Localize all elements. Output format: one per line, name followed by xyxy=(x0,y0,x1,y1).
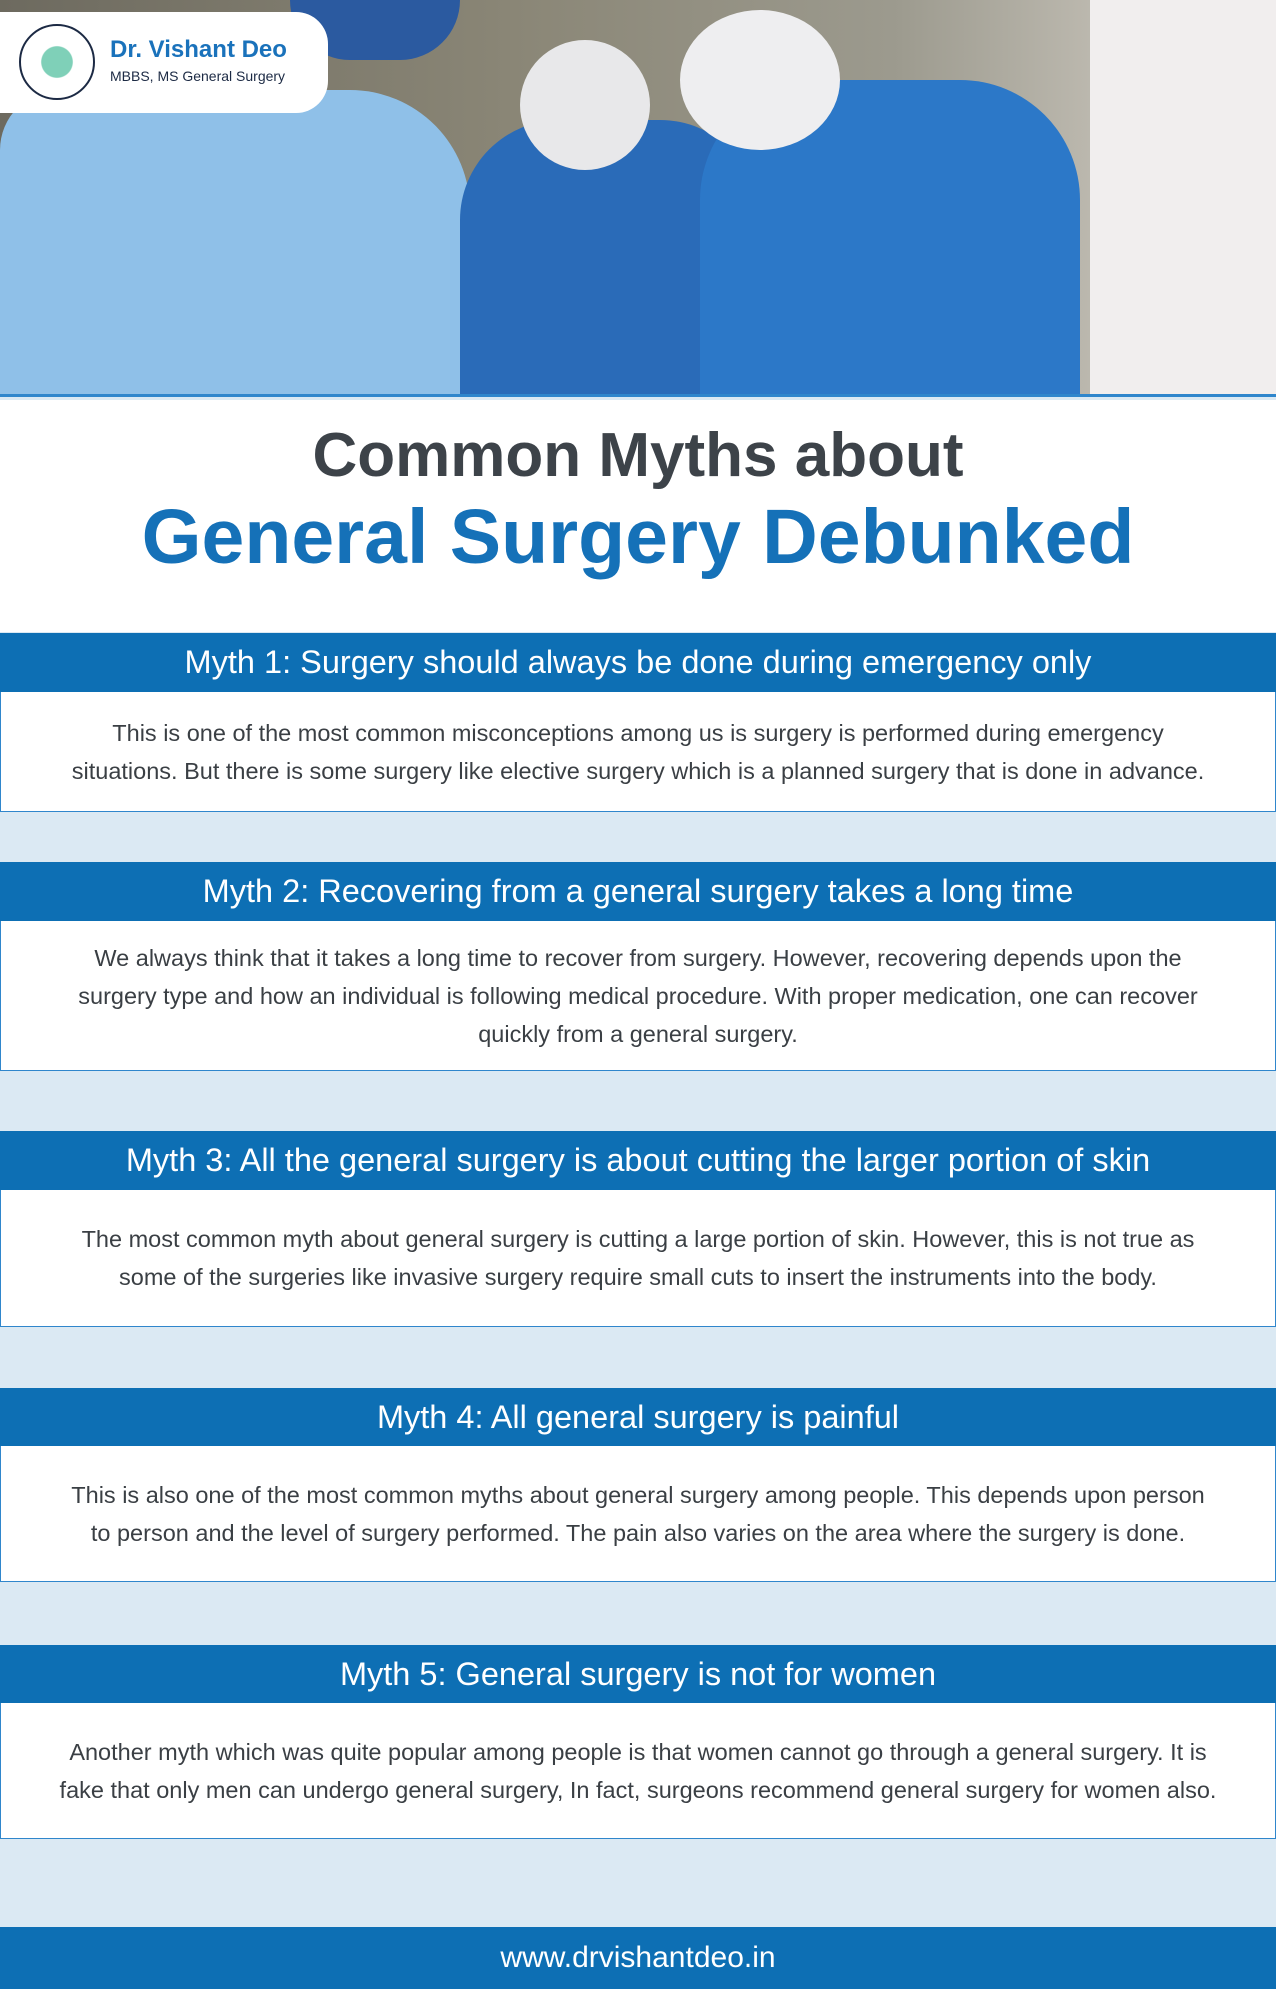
footer website xyxy=(0,1927,1276,1989)
icon: logo circle xyxy=(19,24,95,100)
myth 1 body xyxy=(0,692,1276,812)
doctor name: Dr. Vishant Deo xyxy=(110,36,287,63)
myth 3 header xyxy=(0,1131,1276,1190)
myth 3 body: The most common myth about general surgery is cutting a large portion of skin. However, this is not true as xyxy=(82,1226,1194,1252)
title area xyxy=(0,400,1276,632)
myth 4 body: This is also one of the most common myths about general surgery among people. This depends upon person xyxy=(71,1482,1205,1508)
title line 2: General Surgery Debunked xyxy=(142,494,1134,580)
myth 4 header xyxy=(0,1388,1276,1447)
myth 5 body xyxy=(0,1703,1276,1839)
logo badge xyxy=(0,12,328,113)
title line 1: Common Myths about xyxy=(312,421,963,490)
myth 2 header xyxy=(0,862,1276,921)
myth 1 body: This is one of the most common misconceptions among us is surgery is performed during emergency xyxy=(112,720,1164,746)
myth 3 header: Myth 3: All the general surgery is about cutting the larger portion of skin xyxy=(126,1142,1150,1178)
myth 3 body: some of the surgeries like invasive surgery require small cuts to insert the instruments into the body. xyxy=(119,1264,1157,1290)
myth 2 body xyxy=(0,921,1276,1071)
hero photo xyxy=(0,0,1276,397)
myth 2 body: We always think that it takes a long time to recover from surgery. However, recovering depends upon the xyxy=(94,944,1182,970)
myth 4 body xyxy=(0,1446,1276,1582)
myth 3 body xyxy=(0,1190,1276,1327)
myth 5 header xyxy=(0,1645,1276,1704)
myth 2 body: quickly from a general surgery. xyxy=(478,1020,798,1046)
myth 5 body: Another myth which was quite popular among people is that women cannot go through a general surgery. It is xyxy=(69,1738,1207,1764)
myth 1 header: Myth 1: Surgery should always be done during emergency only xyxy=(185,644,1091,680)
myth 2 body: surgery type and how an individual is following medical procedure. With proper medication, one can recover xyxy=(78,982,1198,1008)
myth 1 header xyxy=(0,633,1276,692)
myth 1 body: situations. But there is some surgery like elective surgery which is a planned surgery that is done in advance. xyxy=(72,758,1204,784)
myth 4 header: Myth 4: All general surgery is painful xyxy=(377,1399,899,1435)
credentials: MBBS, MS General Surgery xyxy=(110,68,285,84)
myth 2 header: Myth 2: Recovering from a general surgery takes a long time xyxy=(203,873,1073,909)
myth 4 body: to person and the level of surgery performed. The pain also varies on the area where the surgery is done. xyxy=(91,1520,1185,1546)
myth 5 header: Myth 5: General surgery is not for women xyxy=(340,1656,936,1692)
footer website: www.drvishantdeo.in xyxy=(500,1941,776,1974)
myth 5 body: fake that only men can undergo general surgery, In fact, surgeons recommend general surgery for women also. xyxy=(60,1776,1216,1802)
